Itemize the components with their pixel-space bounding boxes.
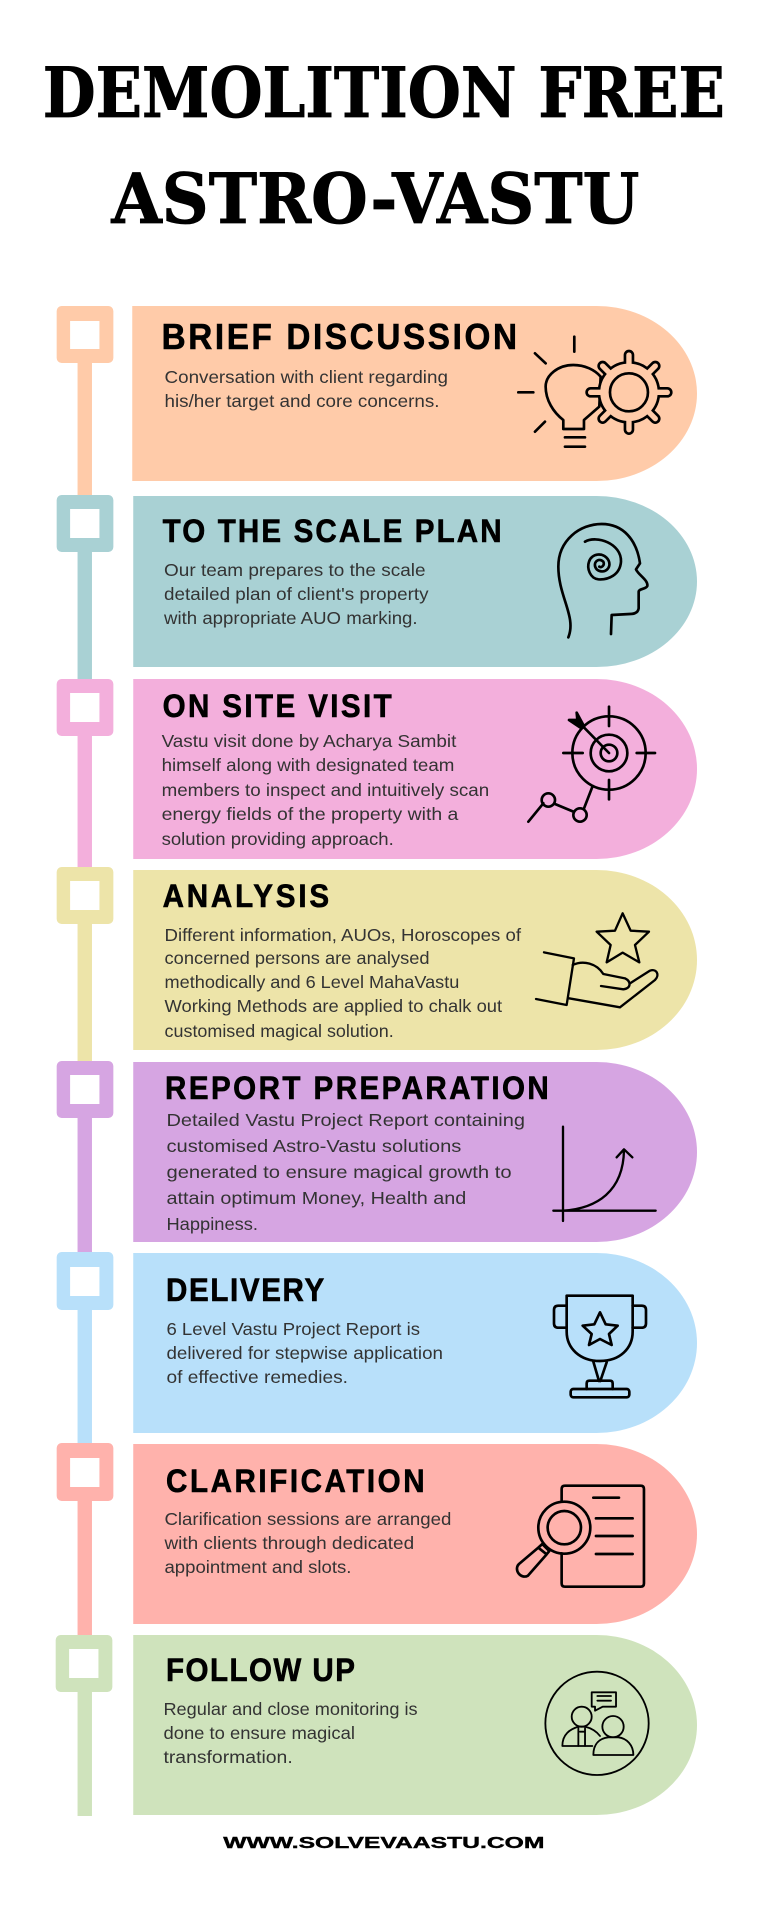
text block: clarification: with clients through dedicated	[163, 1533, 414, 1553]
panel: delivery	[133, 1253, 697, 1433]
heading: on site visit: ON SITE VISIT	[163, 688, 392, 724]
text block: on site visit: energy fields of the property with a	[162, 804, 458, 824]
text block: brief discussion: his/her target and core concerns.	[165, 391, 439, 411]
text block: on site visit: Vastu visit done by Acharya Sambit	[162, 731, 456, 751]
panel: clarification	[133, 1444, 697, 1624]
icon: two people talking in circle	[545, 1672, 649, 1775]
timeline with step markers	[56, 306, 113, 1816]
text block: analysis: Different information, AUOs, Horoscopes of	[165, 925, 522, 945]
icon: magnifier over document	[517, 1486, 644, 1587]
text block: delivery: 6 Level Vastu Project Report is	[166, 1319, 420, 1339]
text block: follow up: Regular and close monitoring is	[163, 1699, 418, 1719]
marker 8	[56, 1635, 112, 1692]
heading: follow up: FOLLOW UP	[166, 1652, 355, 1688]
icon: target with arrow and trend line	[528, 707, 655, 822]
text block: to the scale plan: Our team prepares to the scale	[164, 560, 426, 580]
text block: report preparation	[166, 1110, 525, 1234]
marker 4	[57, 867, 113, 924]
marker 2	[57, 495, 113, 552]
icon: trophy with star	[554, 1296, 646, 1397]
heading: to the scale plan: TO THE SCALE PLAN	[163, 513, 502, 549]
panel: on site visit	[133, 679, 697, 859]
text block: clarification: Clarification sessions are arranged	[164, 1509, 451, 1529]
heading: delivery: DELIVERY	[166, 1272, 325, 1308]
marker 6	[57, 1252, 113, 1310]
text block: analysis: methodically and 6 Level MahaVastu	[165, 972, 459, 992]
text block: analysis: customised magical solution.	[165, 1021, 394, 1041]
text block: analysis: concerned persons are analysed	[165, 948, 430, 968]
panel: analysis	[133, 870, 697, 1050]
marker 7	[57, 1443, 113, 1501]
title: ASTRO-VASTU	[110, 159, 639, 240]
text block: on site visit	[162, 731, 489, 849]
text block: to the scale plan: detailed plan of client's property	[164, 584, 429, 604]
text block: follow up: done to ensure magical	[163, 1723, 355, 1743]
text block: report preparation: generated to ensure magical growth to	[166, 1162, 512, 1182]
marker 5	[57, 1061, 113, 1118]
heading: report preparation: REPORT PREPARATION	[165, 1070, 549, 1106]
text block: delivery: of effective remedies.	[166, 1367, 348, 1387]
heading: analysis: ANALYSIS	[163, 878, 329, 914]
text block: on site visit: members to inspect and intuitively scan	[162, 780, 489, 800]
heading: clarification: CLARIFICATION	[166, 1463, 425, 1499]
text block: follow up: transformation.	[163, 1747, 293, 1767]
title: FREE	[538, 53, 725, 134]
panel: follow up	[133, 1635, 697, 1815]
text block: report preparation: attain optimum Money, Health and	[166, 1188, 466, 1208]
footer: website: WWW.SOLVEVAASTU.COM	[223, 1835, 544, 1852]
heading: brief discussion: BRIEF DISCUSSION	[162, 318, 517, 357]
title	[43, 53, 725, 240]
text block: follow up	[163, 1699, 418, 1767]
text block: brief discussion	[165, 367, 448, 411]
title: DEMOLITION	[43, 53, 517, 134]
icon: head with spiral	[558, 524, 647, 637]
icon: growth chart	[553, 1127, 656, 1221]
text block: report preparation: customised Astro-Vastu solutions	[166, 1136, 461, 1156]
icon: hand holding star	[536, 913, 657, 1007]
text block: on site visit: solution providing approach.	[162, 829, 394, 849]
panel: report preparation	[133, 1062, 697, 1242]
marker 3	[57, 679, 113, 736]
text block: clarification	[163, 1509, 451, 1577]
text block: to the scale plan: with appropriate AUO marking.	[163, 608, 418, 628]
text block: analysis: Working Methods are applied to chalk out	[165, 996, 502, 1016]
text block: report preparation: Happiness.	[166, 1214, 258, 1234]
text block: brief discussion: Conversation with client regarding	[165, 367, 448, 387]
text block: delivery	[166, 1319, 443, 1387]
marker 1	[57, 306, 113, 363]
text block: analysis	[165, 925, 522, 1041]
panel: to the scale plan	[133, 496, 697, 667]
text block: report preparation: Detailed Vastu Project Report containing	[166, 1110, 525, 1130]
text block: on site visit: himself along with designated team	[162, 755, 454, 775]
panel: brief discussion	[132, 306, 697, 481]
text block: to the scale plan	[163, 560, 429, 628]
text block: delivery: delivered for stepwise application	[166, 1343, 443, 1363]
text block: clarification: appointment and slots.	[164, 1557, 351, 1577]
icon: light bulb and gear	[518, 337, 667, 447]
